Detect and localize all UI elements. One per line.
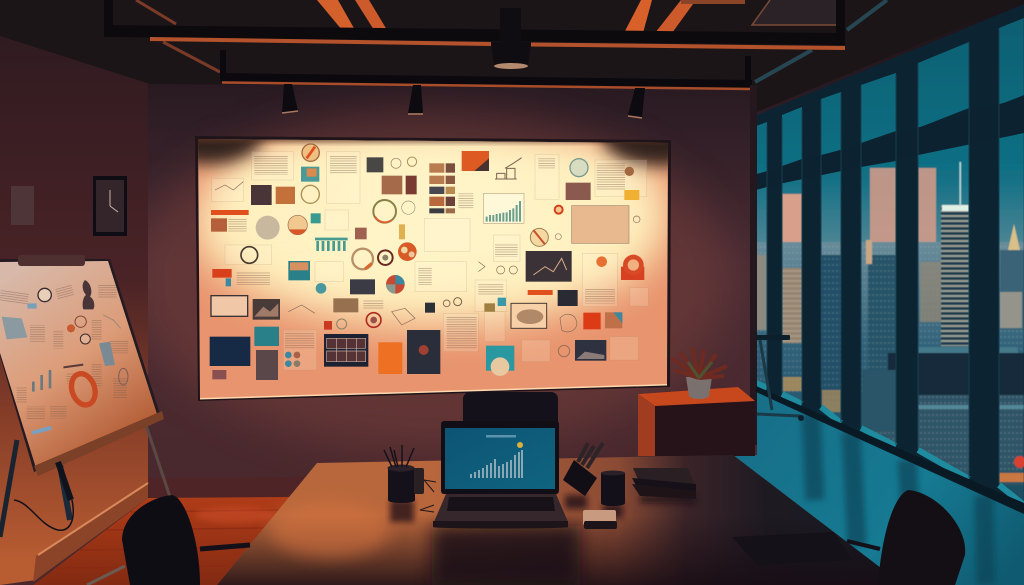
- skyline windows: [750, 245, 1024, 395]
- outdoor view: [750, 0, 1024, 512]
- large red ring: [68, 371, 99, 408]
- marker tray top: [18, 255, 85, 266]
- sunset reflection: [782, 168, 936, 250]
- front armrest: [200, 545, 250, 549]
- panel: infographic wall board: [195, 136, 671, 401]
- image tile left: [2, 317, 27, 339]
- phone: [583, 510, 617, 529]
- potted plant: [672, 348, 727, 399]
- sketch doodles: [215, 182, 577, 332]
- chart surface: [0, 261, 157, 468]
- teal floor: [733, 386, 1024, 585]
- floor mullion reflections: [811, 414, 986, 585]
- portrait top: [83, 280, 94, 309]
- rear track beam: [220, 50, 752, 89]
- front lighting beam: [104, 0, 845, 48]
- object shadows: [390, 495, 696, 522]
- lid: [441, 421, 559, 494]
- notebook: [732, 532, 853, 565]
- rising bar chart: [483, 193, 524, 223]
- city view contents: [750, 0, 1024, 512]
- distant skyline: [750, 242, 1024, 512]
- laptop shadow: [432, 526, 580, 585]
- chart frame: [0, 259, 160, 472]
- window sill glow: [756, 383, 1024, 505]
- track light left: [282, 84, 298, 113]
- left baseboard: [33, 483, 148, 582]
- heading bar: [63, 364, 83, 368]
- board content: [210, 144, 648, 380]
- panel: window wall: [750, 0, 1024, 516]
- transom mullion: [750, 97, 1024, 190]
- screen: [445, 428, 555, 489]
- image tiles: [210, 151, 644, 380]
- left wall: [0, 0, 148, 585]
- base: [434, 494, 568, 522]
- ceiling teal strip: [755, 0, 887, 82]
- table warm patch: [270, 502, 390, 558]
- conference table: [217, 455, 903, 585]
- dark chart card: [526, 251, 572, 282]
- large light panel: [572, 206, 629, 243]
- portrait small: [99, 342, 115, 366]
- standing desk: [756, 335, 804, 421]
- sill rail: [756, 386, 1024, 514]
- ceiling projector: [491, 8, 531, 69]
- lower tray: [34, 411, 164, 476]
- blue tag: [27, 303, 37, 309]
- circular diagrams: [241, 144, 644, 367]
- ceiling light panels: [317, 0, 745, 33]
- main tower: [941, 162, 969, 346]
- buildings left: [757, 239, 942, 390]
- front edge: [433, 521, 568, 528]
- line bar sketch: [495, 158, 522, 179]
- track glow strip: [222, 82, 752, 89]
- blue button: [32, 426, 52, 435]
- back baseboard: [148, 477, 310, 498]
- cabinet: [638, 387, 755, 456]
- teal figures row: [315, 239, 348, 251]
- rear armrest: [87, 566, 125, 585]
- wood floor: [33, 497, 292, 585]
- desk cable: [420, 480, 436, 512]
- ceiling diagonal beams: [136, 0, 220, 72]
- wall clock: [93, 176, 127, 236]
- air vent: [752, 0, 843, 25]
- rear chair: [463, 392, 558, 432]
- text blocks: [0, 284, 128, 420]
- near dark building: [888, 346, 1024, 396]
- board bottom edge light: [200, 384, 667, 398]
- knife block organizer: [563, 443, 603, 496]
- chart content: [0, 280, 128, 435]
- text line blocks: [228, 155, 625, 348]
- easel left leg: [0, 440, 17, 537]
- track light center: [408, 85, 423, 114]
- ring outline: [119, 368, 128, 385]
- keyboard: [447, 497, 555, 511]
- beam glow strip: [150, 39, 845, 48]
- sky: [757, 18, 1024, 242]
- easel center leg: [60, 465, 70, 520]
- right office chair: [847, 490, 965, 585]
- wall glow around board: [130, 110, 730, 450]
- panel: flip chart on easel: [0, 255, 170, 537]
- wall note: [11, 186, 34, 225]
- pen holder: [384, 445, 424, 503]
- board frame: [195, 136, 671, 401]
- screen chart: [471, 435, 523, 478]
- right wall corner: [750, 85, 757, 445]
- easel right leg: [146, 425, 170, 497]
- table bottom shading: [217, 455, 903, 585]
- mug: [601, 470, 625, 506]
- near low building: [862, 370, 1024, 485]
- rings middle: [67, 315, 121, 344]
- pot: [686, 377, 712, 399]
- mullion highlights: [767, 28, 999, 484]
- small sheet grid: [327, 338, 366, 362]
- book stack: [632, 468, 696, 499]
- armrest: [847, 541, 880, 549]
- side cup: [414, 468, 424, 494]
- left office chair: [87, 495, 250, 585]
- right towers: [1000, 224, 1024, 330]
- window frame backing: [750, 4, 1024, 516]
- line bars: [33, 370, 50, 392]
- warm lights: [783, 377, 1024, 482]
- laptop: [433, 421, 568, 528]
- board surface and lighting: [198, 139, 668, 398]
- cable end: [58, 462, 71, 500]
- track light right: [628, 88, 645, 118]
- leaves: [672, 348, 727, 378]
- ceiling: [0, 0, 1024, 112]
- screen heading: [486, 435, 516, 438]
- chart marker: [517, 442, 523, 448]
- ring dial top: [38, 288, 51, 302]
- paper sheets: [212, 152, 648, 370]
- power cable: [14, 500, 73, 530]
